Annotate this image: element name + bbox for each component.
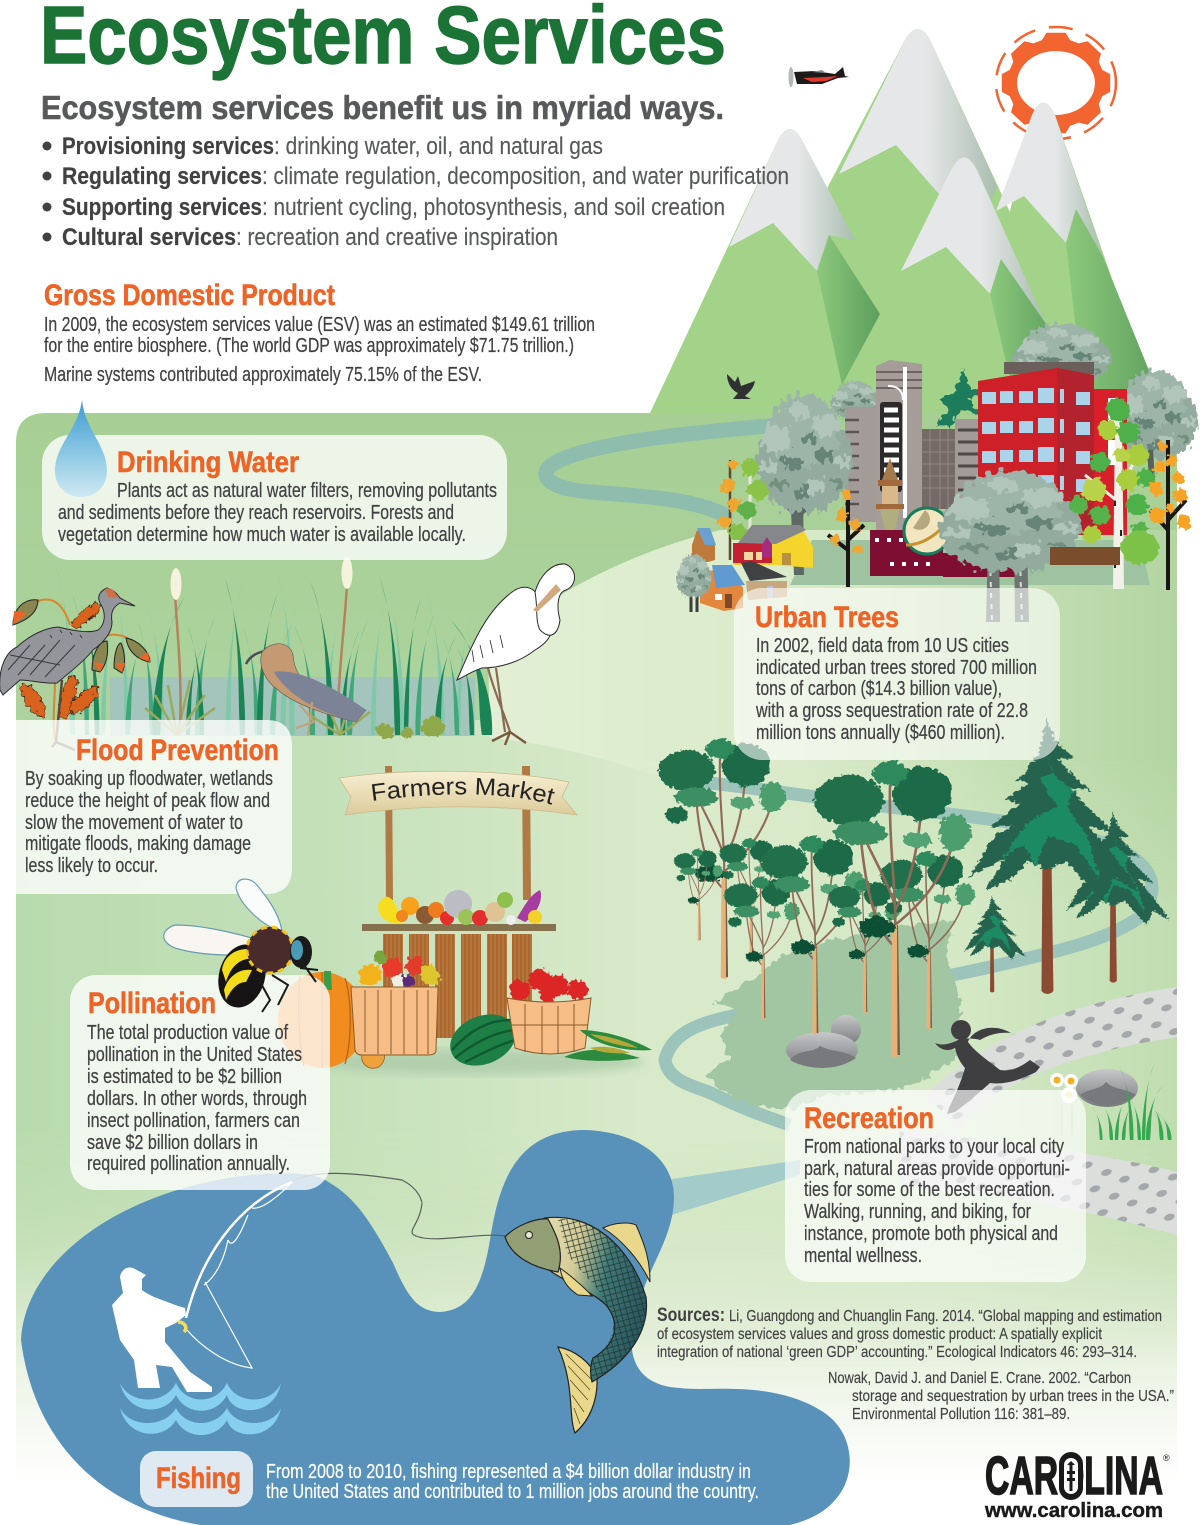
gum tree 7 [880,852,975,1029]
body text: for the entire biosphere. (The world GDP was approximately $71.75 trillion.) [44,335,574,357]
tree: back left [830,381,880,420]
tan spiky plant [145,680,370,735]
fishing label: Fishing [156,1462,241,1495]
sources: Environmental Pollution 116: 381–89. [852,1406,1070,1423]
bullet: provisioning: Provisioning services [62,133,274,160]
fisherman silhouette [112,1267,212,1392]
bullet: regulating: : climate regulation, decomposition, and water purification [262,163,789,190]
gum tree 6 [829,880,899,1013]
logo: Carolina: ® [1163,1453,1170,1463]
town [676,324,1198,622]
mountain: tall centre [700,29,1100,430]
wetland grasses [54,559,492,735]
bullet: provisioning [42,133,603,160]
heading: Urban Trees [755,601,899,634]
shrub and wall [1050,531,1159,565]
scales [558,1219,647,1382]
bullet: cultural: Cultural services [62,224,236,251]
panel: fishing [140,1451,759,1507]
bullet: regulating: Regulating services [62,163,262,190]
body text: instance, promote both physical and [804,1223,1058,1245]
fishing label [140,1451,253,1507]
body text: slow the movement of water to [25,812,243,834]
bullet: regulating [42,163,789,190]
rocks [786,1015,1138,1107]
watermelon [442,1005,524,1075]
bee thorax [247,927,293,973]
mountain: left [650,129,880,420]
panel: drinking water [42,400,507,560]
sign text: Farmers Market [372,778,555,804]
wetland water [110,677,475,736]
grass tuft [1092,1063,1172,1140]
corn [564,1030,652,1061]
tree: orange right [1149,440,1191,590]
stall slats [383,934,532,1038]
heading: Drinking Water [117,446,299,479]
house: dark roof [741,561,787,600]
trees: pines [964,715,1169,994]
body text: Plants act as natural water filters, removing pollutants [117,480,497,502]
body text: pollination in the United States [87,1044,302,1066]
cattails [170,557,352,725]
panel: flood prevention [16,720,292,894]
river: upper [546,424,790,515]
runner [935,1020,1040,1114]
tree: right grey [1113,371,1198,480]
building: side [845,407,876,522]
body text: mental wellness. [804,1245,922,1267]
seed clumps [376,717,445,738]
river: lower [665,1160,800,1217]
heading: Recreation [804,1102,934,1135]
market stall [330,766,644,1078]
pumpkin and gourd [278,971,385,1068]
mountain: front [840,158,1075,420]
tree: orange middle [828,490,864,587]
tail [558,1347,597,1433]
bee wing lower [164,925,274,955]
map-shaped ground shadow [705,920,960,1110]
body text: Marine systems contributed approximately 75.15% of the ESV. [44,364,482,386]
wetland [0,557,575,750]
land background [16,413,1177,1525]
body text [87,1022,307,1175]
tree: small grey [676,554,712,612]
fishing text: the United States and contributed to 1 million jobs around the country. [266,1481,759,1503]
daisies [1050,1073,1078,1135]
ibis [246,644,366,735]
heading: Pollination [88,987,216,1020]
gum tree 8 [814,761,971,1057]
body text: insect pollination, farmers can [87,1110,300,1132]
pectoral fin [560,1268,592,1296]
pine: large [968,715,1141,994]
bullet list [42,133,789,251]
ground shadow [315,1049,645,1075]
building: brown block [922,429,956,509]
panel: pollination [70,975,330,1190]
pine: small left [964,895,1026,992]
bullet: supporting: Supporting services [62,194,262,221]
body text: By soaking up floodwater, wetlands [25,768,273,790]
body text [804,1136,1070,1267]
body text: reduce the height of peak flow and [25,790,270,812]
waves [120,1383,281,1435]
building: maroon [870,530,1015,577]
basket: right [507,969,591,1054]
body text: million tons annually ($460 million). [756,722,1005,744]
icon: airplane [788,67,849,87]
rod line loops [187,1182,292,1368]
tree: orange and birch left [719,459,768,560]
head [505,1219,560,1272]
bee [164,879,318,1013]
sources: Sources: [657,1305,725,1326]
house: blue roof left [692,528,716,562]
body text: In 2009, the ecosystem services value (ESV) was an estimated $149.61 trillion [44,314,595,336]
building: red [978,362,1127,535]
gum tree 3 [719,838,781,954]
body text: vegetation determine how much water is available locally. [58,524,466,546]
mountains [650,29,1170,430]
body text: indicated urban trees stored 700 million [756,657,1037,679]
house: orange with blue roof [700,565,745,611]
field: middle [16,720,1177,1328]
body text: save $2 billion dollars in [87,1132,258,1154]
body text: mitigate floods, making damage [25,833,251,855]
body text: In 2002, field data from 10 US cities [756,635,1009,657]
bullet: provisioning: : drinking water, oil, and natural gas [274,133,603,160]
gum tree 5 [761,836,866,1035]
logo: Carolina [984,1446,1170,1522]
eye [526,1232,532,1238]
stall posts [385,766,531,900]
trees: gum forest [658,739,975,1057]
bullet: supporting: : nutrient cycling, photosynthesis, and soil creation [262,194,725,221]
sources [657,1305,1174,1423]
fishing text [266,1461,759,1503]
sources: Nowak, David J. and Daniel E. Crane. 2002. “Carbon [828,1370,1131,1387]
stone path [900,987,1177,1235]
body text: park, natural areas provide opportuni- [804,1158,1070,1180]
fish [505,1217,650,1433]
tree: left grey [755,394,853,575]
houses: red and yellow [733,525,813,568]
basket: left [351,952,440,1055]
dorsal fin [603,1223,650,1282]
body text: is estimated to be $2 billion [87,1066,282,1088]
bee eye [291,940,303,960]
body text: and sediments before they reach reservoirs. Forests and [58,502,454,524]
river: forest [665,782,1152,1125]
bullet: cultural: : recreation and creative inspiration [236,224,558,251]
panel: recreation [785,1090,1086,1282]
fishing text: From 2008 to 2010, fishing represented a $4 billion dollar industry in [266,1461,751,1483]
orange marsh plant [13,599,150,740]
body text: The total production value of [87,1022,288,1044]
body text: less likely to occur. [25,855,158,877]
tree: conifer [935,368,985,428]
heading: Gross Domestic Product [44,279,335,312]
icon: bird [727,374,755,399]
crane [0,588,135,750]
sun [996,27,1116,139]
fishing line [292,1173,506,1239]
shelf [362,924,556,931]
subtitle: Ecosystem services benefit us in myriad ways. [41,89,724,126]
panel: urban trees [734,588,1060,760]
body text: Walking, running, and biking, for [804,1201,1031,1223]
reel [178,1322,186,1332]
globe [904,508,952,554]
body text: tons of carbon ($14.3 billion value), [756,678,1002,700]
building: right tower [955,419,978,504]
bee head [290,936,312,968]
body text: From national parks to your local city [804,1136,1064,1158]
tree: birch [1069,398,1155,589]
water [21,1130,850,1525]
pagoda [876,458,904,530]
body text: ties for some of the best recreation. [804,1179,1055,1201]
pine: right [1066,810,1169,983]
sources: of ecosystem services values and gross domestic product: A spatially explicit [657,1326,1103,1343]
mountain: right [960,102,1170,430]
fishing rod [186,1182,292,1318]
tree: front grey [938,471,1082,622]
logo snake emblem [1059,1452,1083,1500]
body text [58,480,497,546]
bee wing upper [236,879,282,932]
bee legs [258,965,318,1012]
gum tree 1 [658,739,786,979]
bee abdomen [212,939,272,1013]
body text [25,768,273,877]
bullet: supporting [42,194,725,221]
gross domestic product block [44,279,595,386]
egret [457,564,575,745]
sign banner [339,771,577,815]
gum tree 4 [724,877,799,1019]
body [507,1217,647,1382]
logo: Carolina: www.carolina.com [984,1500,1163,1522]
bullet: cultural [42,224,558,251]
icon: water drop [55,400,107,497]
fisherman [112,1182,292,1435]
produce on shelf [378,890,542,926]
body text [44,314,595,386]
tree: behind red building [1012,324,1112,387]
body text: with a gross sequestration rate of 22.8 [755,700,1028,722]
town ground [790,540,1150,585]
body text [755,635,1037,744]
building: tower [876,360,922,530]
gum tree 2 [674,849,723,941]
heading: Flood Prevention [76,734,279,767]
body text: dollars. In other words, through [87,1088,307,1110]
body text: required pollination annually. [87,1153,290,1175]
field: upper light [488,530,1177,820]
